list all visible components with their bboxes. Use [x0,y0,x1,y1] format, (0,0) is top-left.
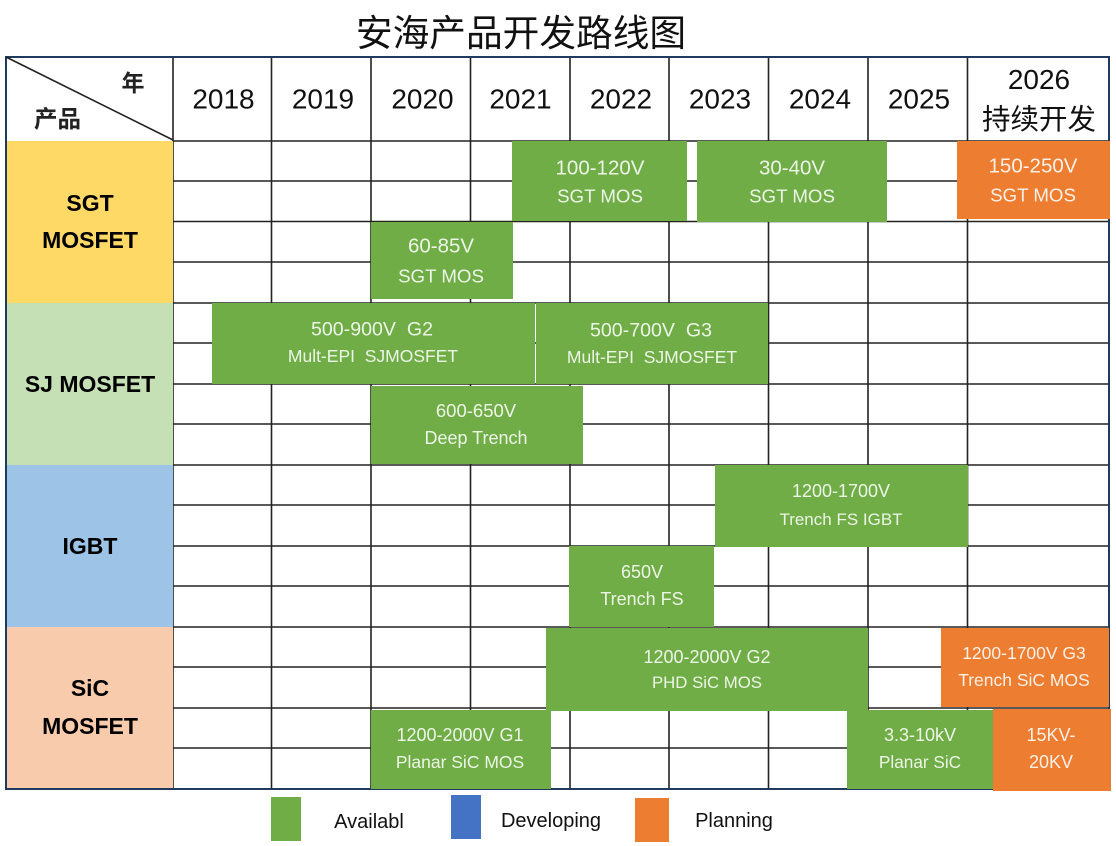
legend: available [271,797,404,841]
bar: 60-85V SGT MOS: SGT MOS [398,266,484,286]
legend: planning: Planning [695,810,773,832]
bar: 1200-1700V G3 Trench SiC MOS: 1200-1700V G3 [962,643,1086,663]
bar: 30-40V SGT MOS: SGT MOS [749,186,835,206]
bar: 1200-1700V Trench FS IGBT [715,465,968,547]
bar: 1200-1700V G3 Trench SiC MOS: Trench SiC MOS [958,670,1090,690]
bar: 3.3-10kV Planar SiC: 3.3-10kV [884,725,956,745]
title: 安海产品开发路线图 [356,13,686,54]
bar: 650V Trench FS: 650V [621,562,663,582]
category: IGBT [7,465,173,627]
bar: 600-650V Deep Trench: Deep Trench [424,428,528,448]
bar: 1200-1700V Trench FS IGBT: 1200-1700V [792,481,890,501]
bar: 1200-2000V G2 PHD SiC MOS [546,628,868,711]
bar: 1200-2000V G2 PHD SiC MOS: PHD SiC MOS [652,673,762,692]
category: IGBT: IGBT [63,533,117,559]
bar: 150-250V SGT MOS: SGT MOS [990,184,1076,206]
legend: planning [635,798,773,842]
category: SJ MOSFET: SJ MOSFET [25,371,155,397]
year headers: 2022 [590,84,652,114]
year headers: 持续开发 [982,104,1096,136]
category: SGT MOSFET: SGT [66,190,114,216]
year headers: 2021 [489,84,552,114]
bar: 500-700V G3 [536,303,768,384]
bar: 500-900V G2 [212,303,535,384]
bar: 1200-2000V G1 Planar SiC MOS [371,710,551,789]
bar: 500-700V G3: Mult-EPI SJMOSFET [567,347,737,367]
bar: 60-85V SGT MOS [371,222,513,299]
year headers: 2018 [192,84,255,114]
bar: 3.3-10kV Planar SiC [847,710,994,789]
bar: 1200-1700V Trench FS IGBT: Trench FS IGBT [779,510,903,529]
legend: available: Availabl [334,811,404,833]
bar: 600-650V Deep Trench: 600-650V [436,400,517,421]
bar: 150-250V SGT MOS: 150-250V [989,154,1078,178]
bar: 30-40V SGT MOS [697,141,887,222]
bar: 1200-2000V G1 Planar SiC MOS: Planar SiC MOS [396,752,524,772]
bar: 100-120V SGT MOS: 100-120V [556,156,645,180]
roadmap grid [173,57,1109,789]
bar: 1200-2000V G2 PHD SiC MOS: 1200-2000V G2 [643,647,771,667]
year headers: 2025 [888,84,950,114]
category: SGT MOSFET [7,141,173,303]
bar: 500-700V G3: 500-700V G3 [590,320,712,342]
bar: 15KV-20KV [993,709,1111,791]
bar: 100-120V SGT MOS [512,141,687,221]
bar: 600-650V Deep Trench [371,386,583,464]
bar: 500-900V G2: Mult-EPI SJMOSFET [288,346,458,366]
year headers: 2019 [292,84,354,114]
bar: 3.3-10kV Planar SiC: Planar SiC [879,752,961,772]
year headers: 2024 [789,84,851,114]
year headers: 2020 [391,84,454,114]
bar: 15KV-20KV: 15KV- [1026,725,1076,745]
category: SiC MOSFET: SiC [71,675,109,701]
category: SiC MOSFET [7,627,173,789]
bar: 650V Trench FS: Trench FS [600,589,684,609]
bar: 500-900V G2: 500-900V G2 [311,318,433,340]
year headers: 2023 [689,84,751,114]
bar: 150-250V SGT MOS [957,141,1110,219]
header corner cell [6,57,173,140]
bar: 60-85V SGT MOS: 60-85V [408,234,474,258]
year headers [192,64,1096,136]
category: SGT MOSFET: MOSFET [42,227,138,253]
category: SJ MOSFET [7,303,173,465]
bar: 30-40V SGT MOS: 30-40V [759,156,825,180]
bar: 100-120V SGT MOS: SGT MOS [557,186,643,206]
bar: 1200-1700V G3 Trench SiC MOS [941,628,1109,707]
bar: 1200-2000V G1 Planar SiC MOS: 1200-2000V G1 [396,725,524,745]
bar: 650V Trench FS [569,546,714,627]
header corner cell: 年 [122,70,144,96]
legend: developing [451,795,601,839]
header corner cell: 产品 [34,106,81,132]
bar: 15KV-20KV: 20KV [1029,752,1073,772]
legend: developing: Developing [501,810,601,832]
category: SiC MOSFET: MOSFET [42,713,138,739]
year headers: 2026 [1008,64,1070,95]
